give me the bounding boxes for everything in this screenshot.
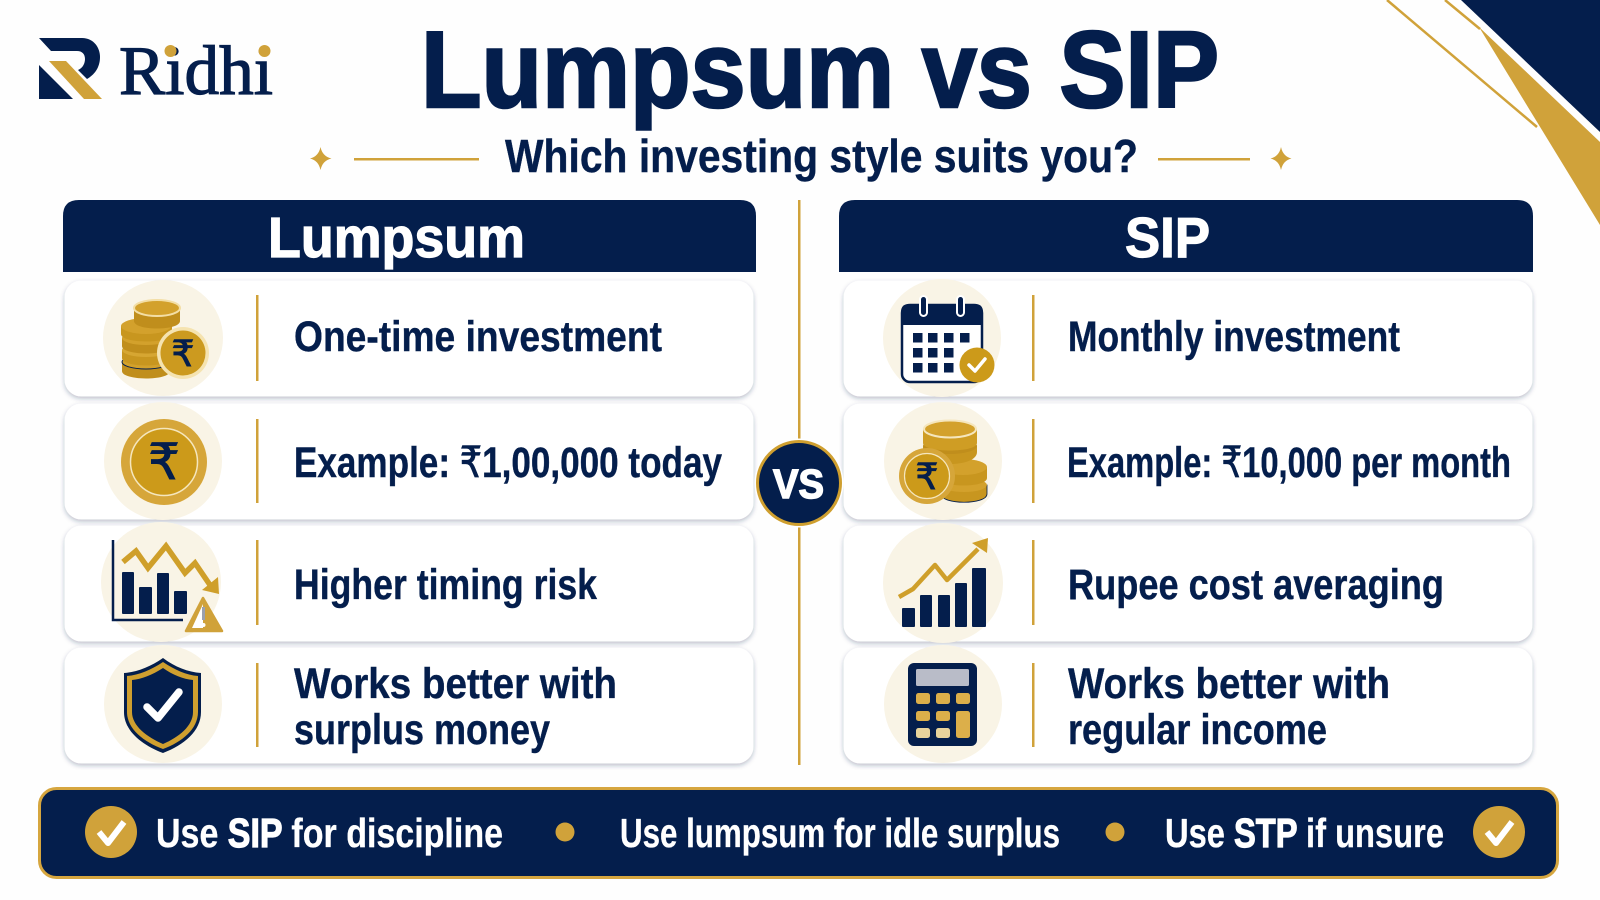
Lumpsum heading band: Lumpsum	[268, 206, 525, 270]
Lumpsum heading band	[63, 200, 756, 272]
icon: falling chart with warning	[113, 540, 222, 631]
row: rupee cost averaging: Rupee cost averaging	[1068, 561, 1444, 609]
logo: Ridhi	[39, 33, 273, 110]
icon: coin stack with rupee: ₹	[172, 333, 194, 374]
row: works better with surplus money	[64, 645, 754, 764]
row: example lumpsum	[64, 402, 754, 520]
row: rupee cost averaging	[844, 523, 1532, 643]
row: example lumpsum: Example: ₹1,00,000 today	[294, 439, 722, 487]
logo wordmark: Ridhi	[119, 33, 273, 110]
icon: shield with check	[124, 658, 201, 753]
subtitle row with ornaments	[310, 130, 1292, 182]
icon: calendar with check	[901, 296, 994, 382]
icon: check left	[85, 806, 137, 858]
SIP heading band: SIP	[1125, 206, 1210, 270]
panel: SIP column	[839, 200, 1533, 764]
icon: rupee coin: ₹	[148, 434, 180, 490]
row: example SIP	[844, 402, 1532, 520]
row: higher timing risk: Higher timing risk	[294, 561, 597, 609]
row: higher timing risk	[64, 522, 754, 642]
subtitle text: Which investing style suits you?	[505, 130, 1138, 182]
footer bar: takeaways	[40, 788, 1558, 878]
icon: rupee coin	[121, 419, 207, 505]
row: one-time investment	[64, 280, 754, 396]
row: one-time investment: One-time investment	[294, 313, 662, 361]
title: Lumpsum vs SIP	[421, 9, 1219, 131]
row: works better with regular income: Works better with	[1068, 660, 1390, 708]
panel: Lumpsum column	[63, 200, 756, 764]
row: works better with regular income	[844, 645, 1532, 764]
icon: coins with rupee: ₹	[916, 456, 938, 497]
icon: rising chart	[899, 538, 988, 627]
icon: R monogram	[39, 38, 102, 99]
takeaway: STP: Use STP if unsure	[1165, 810, 1444, 856]
SIP heading band	[839, 200, 1533, 272]
VS badge	[754, 438, 844, 528]
row: works better with surplus money: Works better with	[294, 660, 617, 708]
decorative corner: navy and gold shapes	[1387, 0, 1600, 225]
icon: check right	[1473, 806, 1525, 858]
icon: calculator	[908, 663, 977, 746]
row: works better with surplus money: surplus money	[294, 706, 550, 754]
bullet dot	[556, 822, 574, 842]
row: example SIP: Example: ₹10,000 per month	[1067, 439, 1511, 487]
row: works better with regular income: regular income	[1068, 706, 1327, 754]
takeaway: SIP: Use SIP for discipline	[156, 810, 503, 856]
VS badge: VS	[773, 461, 824, 507]
icon: left sparkle	[310, 147, 332, 170]
icon: right sparkle	[1270, 147, 1292, 170]
center divider line	[798, 200, 800, 765]
icon: coins with rupee	[899, 420, 987, 504]
bullet dot	[1106, 822, 1124, 842]
row: monthly investment	[844, 279, 1532, 397]
icon: coin stack with rupee	[121, 300, 209, 379]
takeaway: lumpsum: Use lumpsum for idle surplus	[620, 810, 1060, 856]
row: monthly investment: Monthly investment	[1068, 313, 1400, 361]
